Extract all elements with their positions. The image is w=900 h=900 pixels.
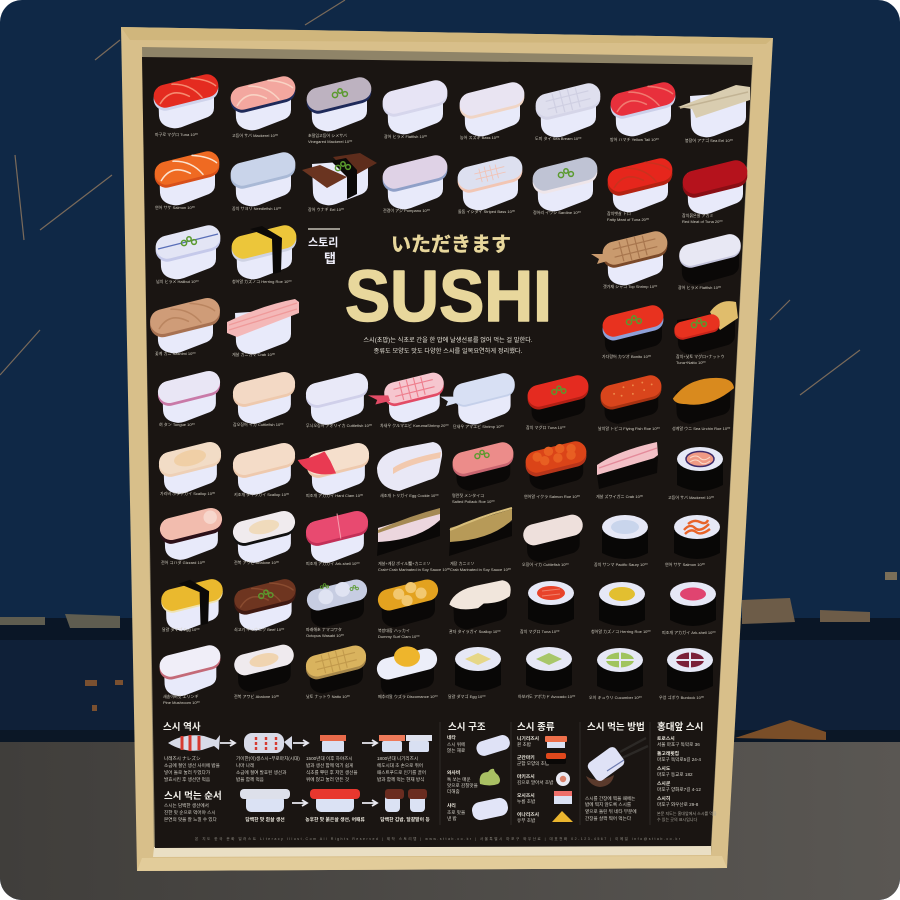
icon: sushi in chopsticks: [586, 745, 626, 783]
sushi: top shrimp: 갯가재 シャコ Top Shrimp 10⁰⁰: [603, 283, 658, 289]
sushi: trumpet shell: [150, 298, 220, 356]
arrow: [362, 740, 377, 746]
hongdae list: 토로스시: [657, 736, 675, 742]
history captions: 패스트푸드로 인기를 끌어: [377, 769, 426, 776]
sushi: cucumber maki: 오이 キュウリ Cucumber 10⁰⁰: [589, 694, 642, 700]
arrow: [293, 740, 308, 746]
types list: 쥔 초밥: [517, 741, 532, 747]
how to eat text: 스시를 간장에 찍을 때에는: [585, 795, 635, 802]
structure notes: 스시 위에: [447, 741, 465, 748]
icon: chopsticks: [620, 738, 648, 758]
sushi: surf clam: Dummy Surf Clam 10⁰⁰: [378, 634, 420, 639]
sushi: top shrimp: [591, 229, 670, 289]
sushi: sea urchin: 성게알 ウニ Sea Urchin Roe 10⁰⁰: [672, 425, 731, 431]
panel: sushi history: [163, 721, 432, 823]
sushi: salmon maki: [665, 515, 720, 567]
types list: 마키즈시: [517, 773, 535, 780]
history captions: 넣어 돌로 눌러 두었다가: [164, 769, 211, 776]
sushi: halibut: [153, 223, 223, 284]
sushi: octopus tempura: 파래해초 ナマコワタ: [306, 626, 342, 632]
icon: rice slab: [471, 796, 509, 822]
sushi: scallop frill: 가리비 ホタテガイ Scallop 10⁰⁰: [160, 490, 216, 496]
sushi: herring roe maki: 청어알 カズノコ Herring Roe 10⁰⁰: [591, 628, 651, 634]
eating order captions: [245, 816, 430, 823]
sushi: sardine: [532, 157, 598, 214]
sushi: hard clam: [298, 441, 371, 498]
types list: 오시즈시: [517, 793, 535, 799]
arrow: [220, 740, 235, 746]
sushi: vinegared mackerel: [304, 75, 374, 144]
sushi: egg maki: 달걀 ダマゴ Egg 10⁰⁰: [448, 693, 486, 699]
history captions: 발효시킨 후 생선만 먹음: [164, 776, 210, 783]
sushi: mackerel maki: [668, 447, 723, 500]
sushi: scallop smooth: [231, 441, 297, 497]
sushi: tuna and natto: 참치+낫토 マグロ+ナットウ: [676, 353, 725, 359]
sushi: flying fish roe: 날치알 トビコ Flying Fish Roe 10⁰⁰: [598, 425, 660, 431]
sushi: mackerel pink: [230, 76, 296, 138]
hongdae list: 마포구 양화로7길 4-12: [657, 786, 701, 793]
sushi: fried egg: [375, 646, 439, 699]
sushi: avocado maki: 아보카도 アボカド Avocado 10⁰⁰: [518, 693, 576, 699]
sushi: cream scallop: 관자 タイラガイ Scallop 10⁰⁰: [449, 628, 501, 634]
icon: white fish sushi: [240, 789, 290, 812]
how to eat text: 밥에 찍지 않도록 스시를: [585, 801, 631, 808]
intro text: [364, 336, 532, 354]
sushi: pollack roe: 명란젓 メンタイコ: [452, 492, 484, 498]
eating order text: 스시는 담백한 생선에서: [164, 802, 209, 809]
logo: [308, 228, 340, 266]
sushi: bass: [460, 82, 524, 140]
title: japanese: いただきます: [391, 233, 511, 256]
sushi: tongue: [156, 369, 222, 427]
structure notes: 네타: [447, 734, 456, 741]
eating order text: 진한 맛 순으로 먹어야 스시: [164, 809, 216, 816]
types list: 누름 초밥: [517, 798, 536, 805]
sushi: long cuttlefish: [304, 371, 372, 428]
types list: 니기리즈시: [517, 735, 539, 742]
sushi: natto grid: 낫토 ナットウ Natto 10⁰⁰: [306, 693, 350, 699]
structure notes: 낸 밥: [447, 815, 458, 821]
how to eat text: 옆으로 돌린 뒤 네타 부분에: [585, 808, 637, 815]
history captions: 나마 나레: [236, 762, 254, 769]
panel: how to eat: [585, 721, 648, 822]
sushi: tuna maki: 참치 マグロ Tuna 10⁰⁰: [520, 628, 560, 634]
sushi: abalone: [231, 509, 297, 565]
sushi: striped beakfish: 돌돔 イシダイ Striped Bass 10⁰⁰: [458, 208, 515, 214]
sushi: cuttlefish plain: 오징어 イカ Cuttlefish 10⁰⁰: [522, 561, 569, 567]
sushi: pickled mushroom: [157, 643, 223, 705]
history captions: 밥과 함께 먹는 현재 방식: [377, 776, 424, 783]
sushi: salmon roe: [523, 439, 589, 499]
structure notes: 톡 쏘는 매운: [447, 776, 471, 783]
sushi: needlefish: 꽁치 サヨリ Needlefish 10⁰⁰: [232, 205, 282, 211]
sushi: crab lens: [596, 442, 658, 499]
sushi: pacific saury maki: 꽁치 サンマ Pacific Saury 10⁰⁰: [594, 561, 648, 567]
sushi: abalone gunkan: 전복 アワビ Abalone 10⁰⁰: [234, 693, 279, 699]
sushi: gizzard shad pink: 전어 コハダ Gizzard 10⁰⁰: [161, 559, 206, 565]
types list: 이나리즈시: [517, 811, 539, 818]
sushi: raw shrimp: [440, 371, 517, 429]
sushi: bonito gunkan: [600, 303, 666, 359]
sushi: natto grid: [304, 643, 368, 699]
history captions: 밥과 생선 함께 먹기 쉽게: [306, 762, 353, 769]
sushi: cuttlefish plain: [521, 512, 585, 567]
icon: fish two: [244, 733, 292, 753]
icon: fish one: [168, 735, 220, 751]
sushi: long cuttlefish: 무늬오징어 アオリイカ Cuttlefish 10⁰⁰: [306, 422, 372, 428]
hongdae list: 돌고래횟집: [657, 750, 679, 757]
hongdae list: 수 있는 곳의 표시입니다: [657, 816, 697, 822]
sushi: hard clam: 피조개 アカガイ Hard Clam 10⁰⁰: [306, 492, 364, 498]
hongdae list: 마포구 독막로5길 24-4: [657, 756, 701, 763]
hongdae list: 마포구 동교로 182: [657, 771, 693, 778]
sushi: egg cockle: 새조개 トリガイ Egg Cockle 10⁰⁰: [380, 492, 439, 498]
sushi: tuna and natto: [673, 301, 738, 365]
sushi: flatfish white: [382, 80, 448, 138]
sushi: crab marinated: [377, 508, 450, 572]
sushi: egg tamago: [159, 577, 225, 632]
sushi: cuttlefish: [232, 372, 296, 426]
sushi: eel with nori band: [302, 153, 377, 212]
sushi: burdock maki: 우엉 ゴボウ Burdock 10⁰⁰: [659, 694, 704, 700]
hongdae list: 마포구 와우산로 29-8: [657, 801, 699, 808]
sushi: needlefish: [228, 150, 298, 211]
history captions: 1500년대 이후 하야즈시: [306, 755, 353, 762]
eating order text: 본연의 맛을 잘 느낄 수 있다: [164, 816, 218, 823]
sushi: salmon: 연어 サケ Salmon 10⁰⁰: [155, 204, 195, 210]
sushi: pompano: 전갱이 アジ Pompano 10⁰⁰: [383, 207, 430, 213]
history captions: [164, 755, 426, 783]
sushi: scallop frill: [157, 440, 223, 496]
panel: sushi types: [517, 722, 573, 824]
structure notes: [447, 734, 478, 821]
sushi: beef: [232, 577, 298, 632]
how to eat text: [585, 795, 637, 822]
sushi: mackerel maki: 고등어 サバ Mackerel 10⁰⁰: [668, 494, 714, 500]
sushi: crab marinated: 게살+게장 ボイル蟹+カニミソ: [378, 560, 431, 566]
sushi: raw shrimp: 단새우 アマエビ Shrimp 10⁰⁰: [453, 423, 504, 429]
sushi: striped beakfish: [455, 154, 525, 214]
history captions: 1800년대 니기리즈시: [377, 755, 418, 762]
history captions: 나레즈시 ナレズシ: [164, 755, 201, 762]
intro text: 종류도 모양도 맛도 다양한 스시를 일목요연하게 정리했다.: [374, 347, 523, 355]
logo: 스토리: [308, 236, 338, 249]
sushi: halibut: 넙치 ヒラメ Halibut 10⁰⁰: [156, 278, 199, 284]
eating order captions: 농후한 맛 붉은살 생선, 어패류: [305, 816, 365, 823]
sushi: yellow tail: [608, 80, 678, 142]
logo: 탭: [324, 251, 336, 266]
history captions: 에도시대 초 손으로 쥐어: [377, 762, 423, 769]
sushi: herring roe tamago: 청어알 カズノコ Herring Roe 10⁰⁰: [232, 278, 292, 284]
sushi: fatty tuna: [605, 156, 675, 222]
structure notes: 와사비: [447, 769, 460, 776]
history captions: 위에 얹고 눌러 만든 것: [306, 776, 349, 783]
sushi: tuna akami: 마구로 マグロ Tuna 10⁰⁰: [155, 131, 198, 137]
icon: red fish sushi: [310, 789, 360, 812]
structure notes: 더해줌: [447, 788, 460, 795]
arrow: [292, 800, 307, 806]
sushi: flatfish gunkan white: [677, 232, 743, 290]
hongdae list: 스시도: [657, 766, 671, 772]
sushi: crab in soy sauce: Crab Marinated in Soy Sauce 10⁰⁰: [450, 567, 511, 572]
sushi: gizzard shad pink: [158, 506, 224, 565]
sushi: avocado maki: [518, 647, 576, 699]
sushi: flatfish white: 광어 ヒラメ Flatfish 10⁰⁰: [384, 133, 428, 139]
heading: eating order: 스시 먹는 순서: [164, 790, 222, 802]
sushi: sea bream: [533, 81, 603, 141]
how to eat text: 간장을 살짝 찍어 먹는다: [585, 815, 632, 822]
heading: history: 스시 역사: [163, 721, 201, 733]
heading: hongdae: 홍대앞 스시: [657, 721, 703, 733]
wooden frame: [121, 27, 773, 871]
sushi: crab lens: 게살 ズワイガニ Crab 10⁰⁰: [596, 493, 643, 499]
title: SUSHI: SUSHI: [345, 257, 552, 337]
icon: soy dish: [586, 775, 614, 787]
sushi: kuruma shrimp: 차새우 クルマエビ KurumaShrimp 20⁰⁰: [380, 422, 449, 428]
history captions: 소금에 절인 생선 사이에 밥을: [164, 762, 220, 769]
icon: oshi type: [554, 791, 572, 804]
intro text: 스시(초밥)는 식초로 간을 한 밥에 날생선류를 얹어 먹는 걸 말한다.: [363, 336, 533, 344]
sushi: abalone gunkan: [232, 642, 296, 699]
sushi: burdock maki: [659, 648, 713, 700]
sushi: flatfish gunkan white: 광어 ヒラメ Flatfish 10⁰⁰: [678, 284, 722, 290]
sushi: herring roe maki: [591, 582, 651, 634]
sushi: bonito gunkan: 가다랑어 カツオ Bonito 10⁰⁰: [602, 353, 651, 359]
sushi: fatty tuna: Fatty Meat of Tuna 20⁰⁰: [607, 217, 650, 222]
sushi: kuruma shrimp: [368, 370, 449, 428]
sushi: fried egg: 메추리알 ウズラ Discomance 10⁰⁰: [378, 693, 438, 699]
structure notes: 초로 맛을: [447, 809, 465, 816]
sushi: ark shell: 피조개 アカガイ Ark-shell 10⁰⁰: [306, 560, 360, 566]
sushi: abalone: 전복 アワビ Abalone 10⁰⁰: [234, 559, 279, 565]
sushi: cucumber maki: [589, 648, 643, 700]
sushi: sardine: 정어리 イワシ Sardine 10⁰⁰: [533, 209, 581, 215]
sushi: tuna and natto: Tuna+Natto 10⁰⁰: [676, 360, 706, 365]
sushi: ark-shell maki: [662, 582, 716, 635]
sushi: surf clam: [376, 577, 440, 639]
sushi: cream scallop: [449, 580, 511, 634]
hongdae list: 본문 지도는 홍대앞에서 스시를 먹을: [657, 810, 717, 816]
sushi: cuttlefish: 갑오징어 イカ Cuttlefish 10⁰⁰: [233, 421, 284, 427]
sushi: pollack roe: Salted Pollack Roe 10⁰⁰: [452, 499, 495, 504]
sushi: yellow tail: 방어 ハマチ Yellow Tail 10⁰⁰: [610, 136, 659, 142]
icon: wasabi: [480, 769, 500, 786]
sushi: flying fish roe: [598, 373, 664, 431]
sushi: eel with nori band: 장어 ウナギ Eel 10⁰⁰: [308, 206, 345, 212]
icon: gunkan type: [546, 753, 566, 764]
sushi: mackerel pink: 고등어 サバ Mackerel 10⁰⁰: [232, 132, 278, 138]
panel: sushi structure: [440, 722, 650, 825]
sushi: tuna akami: [151, 72, 221, 137]
history captions: 소금에 절여 발효된 생선과: [236, 769, 287, 776]
hongdae list: 스시쿤: [657, 781, 671, 787]
sushi: vinegared mackerel: Vinegared Mackerel 10⁰⁰: [308, 139, 353, 144]
icon: neta slab: [475, 733, 512, 758]
icon: maki type: [556, 772, 570, 786]
sushi: salmon: [154, 151, 220, 210]
sushi: egg maki: [448, 647, 501, 699]
sushi: beef: 쇠고기 ギュウニク Beef 10⁰⁰: [234, 626, 285, 632]
sushi: trumpet shell: 꽃게 カニ Sashimi 10⁰⁰: [155, 350, 196, 356]
sushi: crab stick pink: [227, 299, 299, 357]
types list: 군함 모양의 초밥: [517, 760, 550, 767]
panel: hongdae sushi: [657, 721, 717, 822]
sushi: salmon maki: 연어 サケ Salmon 10⁰⁰: [665, 561, 705, 567]
sushi: scallop smooth: 키조개 タイラガイ Scallop 10⁰⁰: [234, 491, 290, 497]
sushi: pompano: [380, 153, 450, 213]
heading: how to eat: 스시 먹는 방법: [587, 721, 645, 733]
footer: 본 지도 한국 문화 일러스트 Literacy Illust.Com All Rights Reserved | 제작 스토리탭 | www.sttab.co.kr | 서울특별시 마포구 와우산로 | 대표전화 02-123-4567 | 이메일 info@sttab.co.kr: [195, 836, 681, 841]
icon: inari type: [552, 811, 573, 822]
sushi: bass: 농어 スズキ Bass 10⁰⁰: [460, 134, 500, 140]
sushi: crab in soy sauce: 게장 カニミソ: [450, 560, 474, 566]
poster background: [142, 57, 752, 848]
types list: [517, 735, 554, 824]
arrow: [362, 800, 377, 806]
sushi: vinegared mackerel: 초절임고등어 シメサバ: [308, 132, 347, 138]
sushi: pollack roe: [450, 440, 516, 504]
sushi: tuna maki: [520, 581, 574, 634]
sushi: octopus tempura: Octopus Wasabi 10⁰⁰: [306, 633, 344, 638]
sushi: salmon roe: 연어알 イクラ Salmon Roe 10⁰⁰: [524, 493, 580, 499]
sushi: pickled mushroom: Pine Mushroom 10⁰⁰: [163, 700, 200, 705]
eating order captions: 담백한 김밥, 달걀말이 등: [380, 816, 430, 823]
sushi: herring roe tamago: [229, 223, 299, 284]
structure notes: 얹는 재료: [447, 747, 465, 754]
sushi: crab stick pink: 게살 カニカマ Crab 10⁰⁰: [232, 351, 275, 357]
sushi: ark-shell maki: 피조개 アカガイ Ark-shell 10⁰⁰: [662, 629, 716, 635]
sushi: sea urchin: [672, 378, 734, 431]
sushi: egg cockle: [377, 442, 442, 498]
hongdae list: 서울 마포구 독막로 36: [657, 741, 700, 748]
structure notes: 샤리: [447, 802, 456, 809]
heading: structure: 스시 구조: [448, 722, 486, 733]
icon: nigiri type: [545, 736, 567, 748]
sushi: sea eel: [678, 85, 750, 143]
sushi: crab in soy sauce: [449, 508, 512, 572]
icon: split sushi: [385, 789, 427, 812]
types list: 군칸마키: [517, 754, 535, 761]
history captions: 밥을 함께 먹음: [236, 776, 264, 783]
sushi: ark shell: [304, 509, 370, 566]
types list: 유부 초밥: [517, 817, 536, 824]
sushi: pacific saury maki: [594, 515, 648, 567]
history captions: 기이한(이)생스시~무로마치(시대): [236, 755, 300, 762]
heading: types: 스시 종류: [517, 722, 555, 733]
sushi: tongue: 혀 タン Tongue 10⁰⁰: [159, 421, 195, 427]
sushi: red tuna: Red Meat of Tuna 20⁰⁰: [682, 219, 723, 224]
sushi: sea bream: 도미 タイ Sea Bream 10⁰⁰: [535, 135, 582, 141]
sushi: pickled mushroom: 새송이버섯 エリンギ: [163, 693, 199, 699]
sushi: red tuna: [682, 160, 748, 223]
sushi: octopus tempura: [305, 577, 369, 638]
sushi: crab marinated: Crab+Crab Marinated in Soy Sauce 10⁰⁰: [378, 567, 450, 572]
icon: nigiri pair: [379, 735, 432, 752]
sushi: sea eel: 붕장어 アナゴ Sea Eel 10⁰⁰: [685, 137, 733, 143]
sushi: surf clam: 북방대합 ハッカイ: [378, 627, 410, 633]
history captions: 식초를 뿌린 후 저민 생선을: [306, 769, 358, 776]
sushi: marinated tuna: [525, 373, 591, 430]
sushi: fatty tuna: 참치뱃살 トロ: [607, 210, 631, 216]
hongdae list: [657, 736, 717, 822]
eating order text: [164, 802, 218, 823]
icon: box sushi: [320, 735, 346, 752]
hongdae list: 스시히: [657, 795, 670, 802]
eating order captions: 담백한 맛 흰살 생선: [245, 816, 285, 823]
sushi: egg tamago: 달걀 ダマゴ Egg 10⁰⁰: [162, 626, 200, 632]
sushi: marinated tuna: 참치 マグロ Tuna 10⁰⁰: [526, 424, 566, 430]
structure notes: 맛으로 감칠맛을: [447, 782, 478, 789]
types list: 김으로 말아서 초밥: [517, 779, 554, 786]
sushi: red tuna: 참치붉은살 アカミ: [682, 212, 714, 218]
